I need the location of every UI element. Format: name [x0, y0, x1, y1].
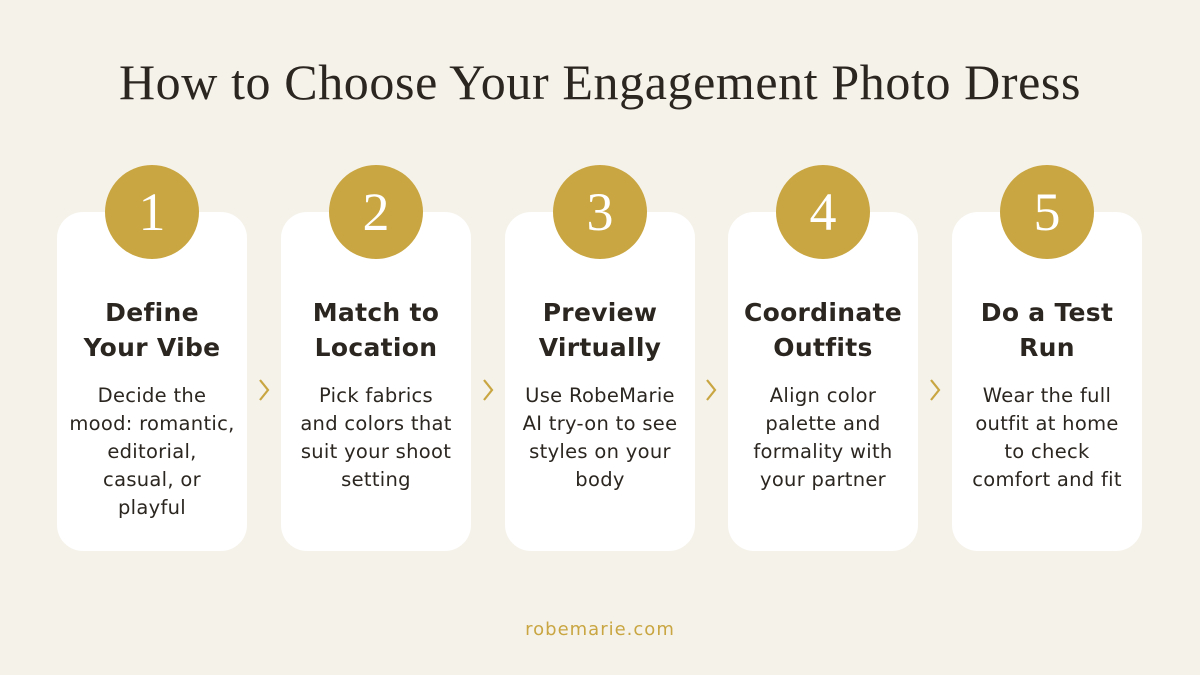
- panel: step 1: [57, 212, 247, 551]
- heading: step 5: Run: [1019, 333, 1075, 362]
- heading: step 4: Outfits: [773, 333, 873, 362]
- text: step 3: [522, 384, 677, 491]
- heading: step 2: Location: [315, 333, 437, 362]
- panel: step 5: [952, 212, 1142, 551]
- text: step 1: [69, 384, 235, 519]
- heading: step 3: [538, 298, 661, 362]
- text: step 1: casual, or: [103, 468, 201, 491]
- text: step 2: [300, 384, 452, 491]
- text: step 5: comfort and fit: [972, 468, 1122, 491]
- icon: number 4: [776, 165, 870, 259]
- footer: robemarie.com: [525, 619, 675, 640]
- heading: step 3: Virtually: [539, 333, 661, 362]
- text: step 4: palette and: [765, 412, 881, 435]
- icon: number 3: [553, 165, 647, 259]
- arrow 1: [259, 379, 270, 401]
- text: step 2: and colors that: [300, 412, 452, 435]
- text: step 3: Use RobeMarie: [525, 384, 675, 407]
- icon: number 2: 2: [362, 182, 390, 242]
- text: step 5: outfit at home: [975, 412, 1119, 435]
- icon: number 1: [105, 165, 199, 259]
- panel: step 3: [505, 212, 695, 551]
- heading: step 5: Do a Test: [981, 298, 1113, 327]
- heading: step 1: [84, 298, 220, 362]
- text: step 4: formality with: [753, 440, 893, 463]
- text: step 5: to check: [1004, 440, 1090, 463]
- arrow 4: [930, 379, 940, 401]
- text: step 2: setting: [341, 468, 411, 491]
- text: step 3: body: [575, 468, 625, 491]
- heading: step 4: Coordinate: [744, 298, 902, 327]
- text: step 1: playful: [118, 496, 186, 519]
- panel: step 4: [728, 212, 918, 551]
- text: step 5: [972, 384, 1122, 491]
- icon: number 4: 4: [810, 182, 836, 242]
- text: step 5: Wear the full: [983, 384, 1111, 407]
- text: step 1: Decide the: [98, 384, 206, 407]
- arrow 2: [483, 379, 494, 401]
- heading: step 4: [744, 298, 902, 362]
- text: step 1: mood: romantic,: [69, 412, 235, 435]
- text: step 4: Align color: [770, 384, 876, 407]
- text: step 3: styles on your: [529, 440, 671, 463]
- text: step 4: your partner: [760, 468, 886, 491]
- heading: step 2: [313, 298, 439, 362]
- heading: step 3: Preview: [543, 298, 657, 327]
- arrow 3: [706, 379, 716, 401]
- text: step 4: [753, 384, 893, 491]
- icon: number 2: [329, 165, 423, 259]
- text: step 3: AI try-on to see: [523, 412, 677, 435]
- text: step 2: suit your shoot: [301, 440, 451, 463]
- icon: number 1: 1: [138, 182, 166, 242]
- icon: number 5: [1000, 165, 1094, 259]
- text: step 1: editorial,: [107, 440, 197, 463]
- title: How to Choose Your Engagement Photo Dress: [119, 54, 1081, 110]
- panel: step 2: [281, 212, 471, 551]
- heading: step 5: [981, 298, 1113, 362]
- icon: number 5: 5: [1034, 182, 1060, 242]
- text: step 2: Pick fabrics: [319, 384, 433, 407]
- heading: step 1: Define: [105, 298, 199, 327]
- heading: step 2: Match to: [313, 298, 439, 327]
- icon: number 3: 3: [586, 182, 614, 242]
- heading: step 1: Your Vibe: [84, 333, 220, 362]
